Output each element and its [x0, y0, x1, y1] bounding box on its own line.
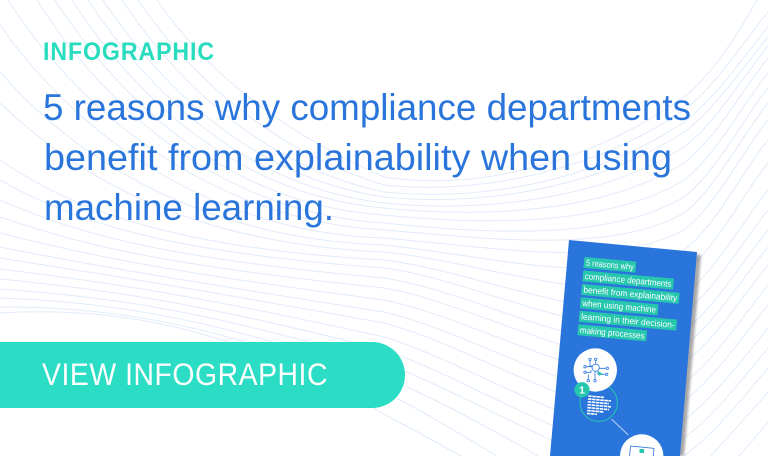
thumbnail step two icon — [620, 434, 663, 456]
thumbnail step one body text — [587, 396, 611, 414]
thumbnail title: compliance departments — [584, 271, 672, 289]
thumbnail title: benefit from explainability — [583, 285, 678, 303]
thumbnail title: 5 reasons why — [586, 258, 635, 272]
thumbnail title: making processes — [579, 325, 646, 341]
thumbnail step one ring — [580, 384, 617, 421]
headline: 5 reasons why compliance departments — [43, 87, 691, 128]
eyebrow label: INFOGRAPHIC — [43, 38, 215, 66]
headline: machine learning. — [44, 187, 334, 228]
thumbnail step one badge — [574, 382, 590, 397]
call-to-action button: VIEW INFOGRAPHIC — [42, 356, 328, 392]
infographic document thumbnail — [550, 240, 701, 456]
thumbnail step one badge: 1 — [579, 385, 585, 397]
call-to-action button — [0, 342, 405, 408]
thumbnail title — [577, 257, 682, 344]
thumbnail title: learning in their decision- — [581, 311, 675, 330]
headline: benefit from explainability when using — [44, 137, 672, 178]
headline — [43, 87, 691, 228]
thumbnail connector — [612, 419, 628, 435]
thumbnail step one icon — [574, 348, 617, 392]
thumbnail title: when using machine — [581, 298, 657, 315]
